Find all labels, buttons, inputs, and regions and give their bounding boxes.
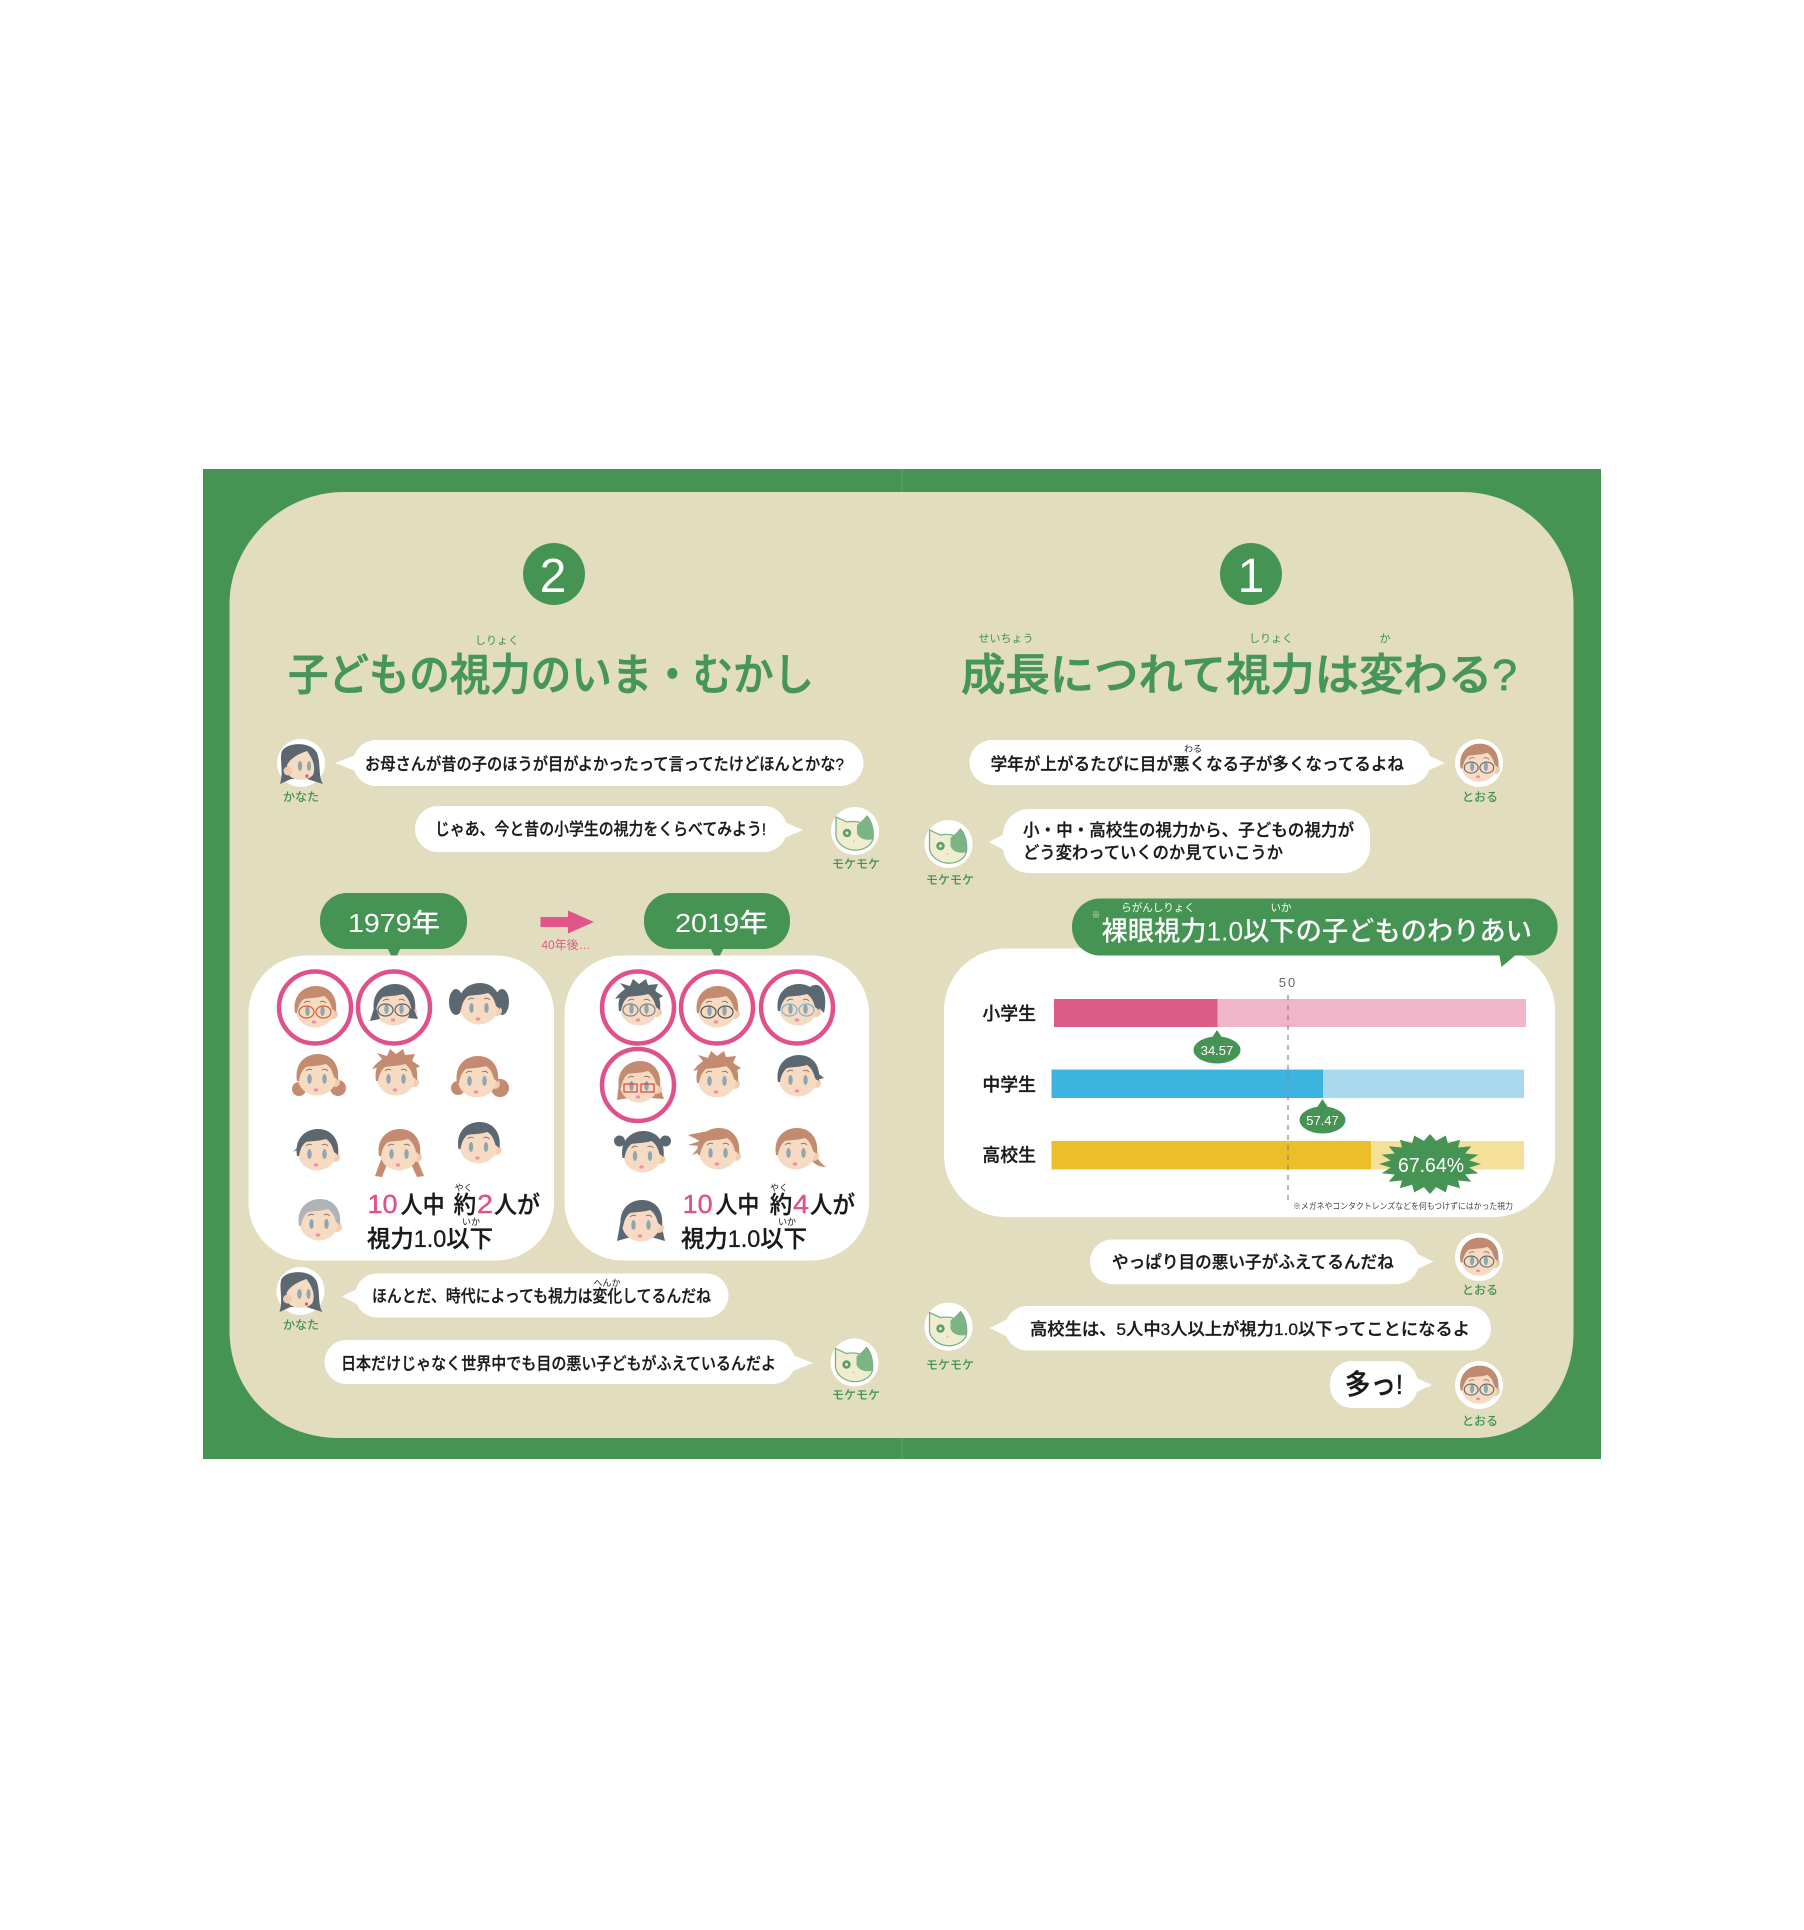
section number 2: 2 [540,550,566,603]
speech bubble: mokemoke 1: じゃあ、今と昔の小学生の視力をくらべてみよう! [435,820,766,839]
beige panel [230,492,1574,1438]
count text: いか [462,1217,480,1227]
footnote: ※メガネやコンタクトレンズなどを何もつけずにはかった視力 [1293,1201,1513,1211]
face 13 [778,984,825,1026]
avatar: mokemoke right 1 [924,820,974,887]
bar: high school [1052,1141,1524,1169]
avatar: kanata bottom: かなた [283,1318,319,1332]
panel: chart [944,948,1555,1217]
avatar: mokemoke right 2 [924,1303,974,1372]
speech bubble: mokemoke 3: 小・中・高校生の視力から、子どもの視力が [1023,820,1354,840]
row label: 中学生 [982,1075,1036,1095]
title: left [288,634,814,700]
arrow: 40 years later: 40年後… [541,938,591,952]
face 15 [693,1051,741,1098]
count text [681,1183,855,1253]
face 18 [688,1128,741,1170]
face 5 [372,1049,420,1096]
title: right: せいちょう [978,632,1034,645]
count text: 約 [770,1192,792,1219]
callout 67.64%: 67.64% [1398,1155,1464,1177]
chart heading: いか [1270,902,1292,914]
avatar: mokemoke bottom left [830,1338,880,1402]
speech bubble: mokemoke 3 [989,809,1370,873]
chart heading: らがんしりょく [1121,901,1195,914]
rings [602,972,833,1121]
panel: 1979 faces [248,956,554,1260]
callout 57.47 [1300,1099,1346,1134]
face 1 [295,986,338,1028]
count text: やく [770,1183,788,1193]
face 7 [293,1129,340,1170]
count text: 4 [793,1189,809,1219]
avatar: mokemoke right 1: モケモケ [926,873,974,887]
speech bubble: kanata 2: へんか [593,1278,621,1288]
speech bubble: toru 2 [1090,1240,1434,1284]
avatar: toru middle [1455,1233,1503,1297]
avatar: kanata top [277,739,325,804]
title: left: 子どもの視力のいま・むかし [288,651,814,700]
avatar: mokemoke top left: モケモケ [832,857,880,871]
speech bubble: kanata 1: お母さんが昔の子のほうが目がよかったって言ってたけどほんとかな? [365,754,844,774]
count text: いか [778,1217,796,1227]
chart heading: 裸眼視力1.0以下の子どものわりあい [1102,916,1532,946]
title: right: か [1380,632,1390,645]
speech bubble: toru 3 [1330,1361,1432,1408]
count text: 人が [810,1192,855,1219]
face 16 [778,1055,824,1096]
speech bubble: kanata 2 [342,1274,728,1318]
speech bubble: kanata 1 [335,740,864,786]
section number 1: 1 [1238,550,1264,603]
speech bubble: toru 1: わる [1184,744,1202,754]
face 8 [375,1129,424,1177]
count text: 人中 [401,1192,445,1219]
avatar: toru top [1455,739,1503,804]
avatar: toru bottom: とおる [1462,1414,1498,1428]
callout 67.64% [1379,1134,1481,1194]
avatar: mokemoke top left [831,807,880,871]
face 17 [614,1131,671,1172]
count text: 視力1.0以下 [681,1226,807,1253]
rings [279,972,430,1044]
speech bubble: toru 2: やっぱり目の悪い子がふえてるんだね [1112,1252,1394,1272]
callout 34.57: 34.57 [1201,1043,1233,1058]
speech bubble: mokemoke 2 [324,1340,813,1384]
avatar: mokemoke bottom left: モケモケ [832,1388,880,1402]
count text: 約 [454,1192,476,1219]
face 4 [292,1054,346,1096]
title: left: しりょく [475,634,519,647]
speech bubble: mokemoke 4 [990,1306,1491,1350]
avatar: mokemoke right 2: モケモケ [926,1358,974,1372]
face 20 [617,1200,665,1242]
bar: junior high [1052,1070,1524,1098]
label 1979 [320,893,467,962]
count text: 人中 [715,1192,759,1219]
face 10 [299,1199,342,1240]
count text: やく [455,1183,473,1193]
label 1979: 1979年 [348,908,440,938]
page seam [901,469,903,1459]
section number 2 [523,543,585,605]
count text: 10 [368,1189,398,1219]
section number 1 [1220,543,1282,605]
speech bubble: kanata 2: ほんとだ、時代によっても視力は変化してるんだね [372,1287,711,1306]
speech bubble: toru 1: 学年が上がるたびに目が悪くなる子が多くなってるよね [991,754,1404,774]
chart heading [1072,898,1558,967]
green frame [203,469,1601,1459]
face 19 [776,1128,826,1170]
face 6 [451,1056,509,1098]
avatar: kanata bottom [276,1267,324,1332]
avatar: kanata top: かなた [283,790,319,804]
avatar: toru middle: とおる [1462,1283,1498,1297]
face 11 [615,979,663,1026]
callout 34.57 [1194,1030,1240,1064]
speech bubble: toru 1 [970,740,1445,785]
label 2019: 2019年 [675,908,768,938]
label 2019 [644,893,790,962]
speech bubble: mokemoke 2: 日本だけじゃなく世界中でも目の悪い子どもがふえているんだよ [341,1354,776,1374]
face 14 [617,1061,664,1102]
face 9 [458,1122,502,1164]
panel: 2019 faces [565,956,869,1260]
50 marker: 50 [1279,975,1297,990]
title: right: 成長につれて視力は変わる? [961,651,1517,700]
speech bubble: mokemoke 1 [415,806,803,852]
count text: 2 [477,1189,493,1219]
avatar: toru bottom [1455,1361,1503,1428]
row label: 小学生 [982,1004,1036,1024]
bar: elementary [1054,999,1526,1027]
count text: 10 [683,1189,713,1219]
chart heading: ※ [1091,910,1101,920]
count text [367,1183,540,1253]
arrow: 40 years later [540,910,594,952]
callout 57.47: 57.47 [1306,1113,1339,1128]
speech bubble: mokemoke 3: どう変わっていくのか見ていこうか [1023,844,1283,862]
row label: 高校生 [982,1146,1036,1166]
count text: 人が [494,1192,540,1219]
face 2 [370,984,418,1026]
face 3 [449,983,509,1024]
title: right: しりょく [1249,632,1293,645]
avatar: toru top: とおる [1462,790,1498,804]
face 12 [697,986,740,1028]
count text: 視力1.0以下 [367,1226,493,1253]
speech bubble: mokemoke 4: 高校生は、5人中3人以上が視力1.0以下ってことになるよ [1030,1319,1470,1339]
speech bubble: toru 3: 多っ! [1345,1369,1403,1400]
